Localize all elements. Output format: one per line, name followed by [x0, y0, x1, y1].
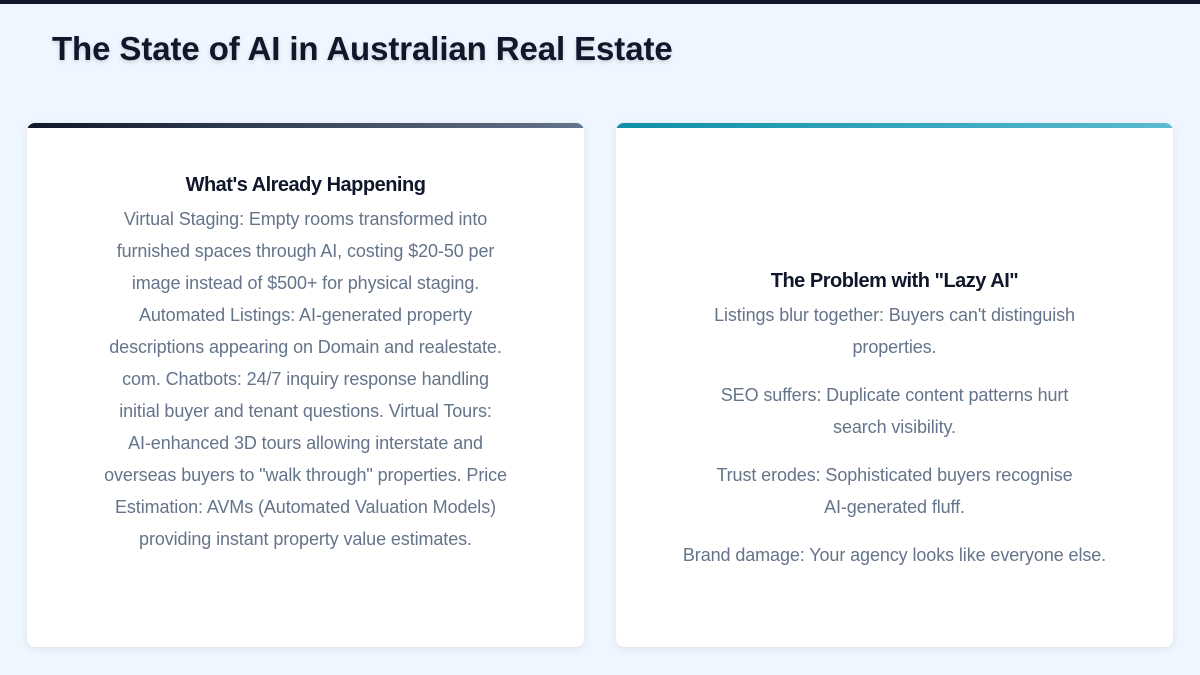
- text block: happening list: descriptions appearing on Domain and realestate.: [109, 337, 502, 357]
- title: The State of AI in Australian Real Estate: [52, 30, 673, 67]
- panel: what's already happening: [27, 123, 584, 647]
- text block: happening list: providing instant property value estimates.: [139, 529, 472, 549]
- text block: happening list: [104, 209, 507, 549]
- text block: problems: properties.: [853, 337, 936, 357]
- text block: problems: [683, 305, 1106, 565]
- text block: happening list: Virtual Staging: Empty rooms transformed into: [124, 209, 487, 229]
- text block: problems: search visibility.: [833, 417, 956, 437]
- text block: happening list: image instead of $500+ for physical staging.: [132, 273, 479, 293]
- text block: problems: Trust erodes: Sophisticated buyers recognise: [716, 465, 1073, 485]
- text block: happening list: com. Chatbots: 24/7 inquiry response handling: [122, 369, 489, 389]
- text block: problems: Listings blur together: Buyers can't distinguish: [714, 305, 1075, 325]
- heading: what's already happening: What's Already Happening: [186, 174, 425, 196]
- text block: problems: AI-generated fluff.: [824, 497, 965, 517]
- text block: happening list: AI-enhanced 3D tours allowing interstate and: [128, 433, 483, 453]
- heading: lazy AI: The Problem with "Lazy AI": [771, 270, 1018, 292]
- panel: lazy AI problem: [616, 123, 1173, 647]
- text block: happening list: Estimation: AVMs (Automated Valuation Models): [115, 497, 496, 517]
- text block: problems: SEO suffers: Duplicate content patterns hurt: [721, 385, 1068, 405]
- text block: happening list: initial buyer and tenant questions. Virtual Tours:: [119, 401, 492, 421]
- text block: happening list: Automated Listings: AI-generated property: [139, 305, 472, 325]
- text block: problems: Brand damage: Your agency looks like everyone else.: [683, 545, 1106, 565]
- text block: happening list: overseas buyers to "walk through" properties. Price: [104, 465, 507, 485]
- text block: happening list: furnished spaces through AI, costing $20-50 per: [117, 241, 494, 261]
